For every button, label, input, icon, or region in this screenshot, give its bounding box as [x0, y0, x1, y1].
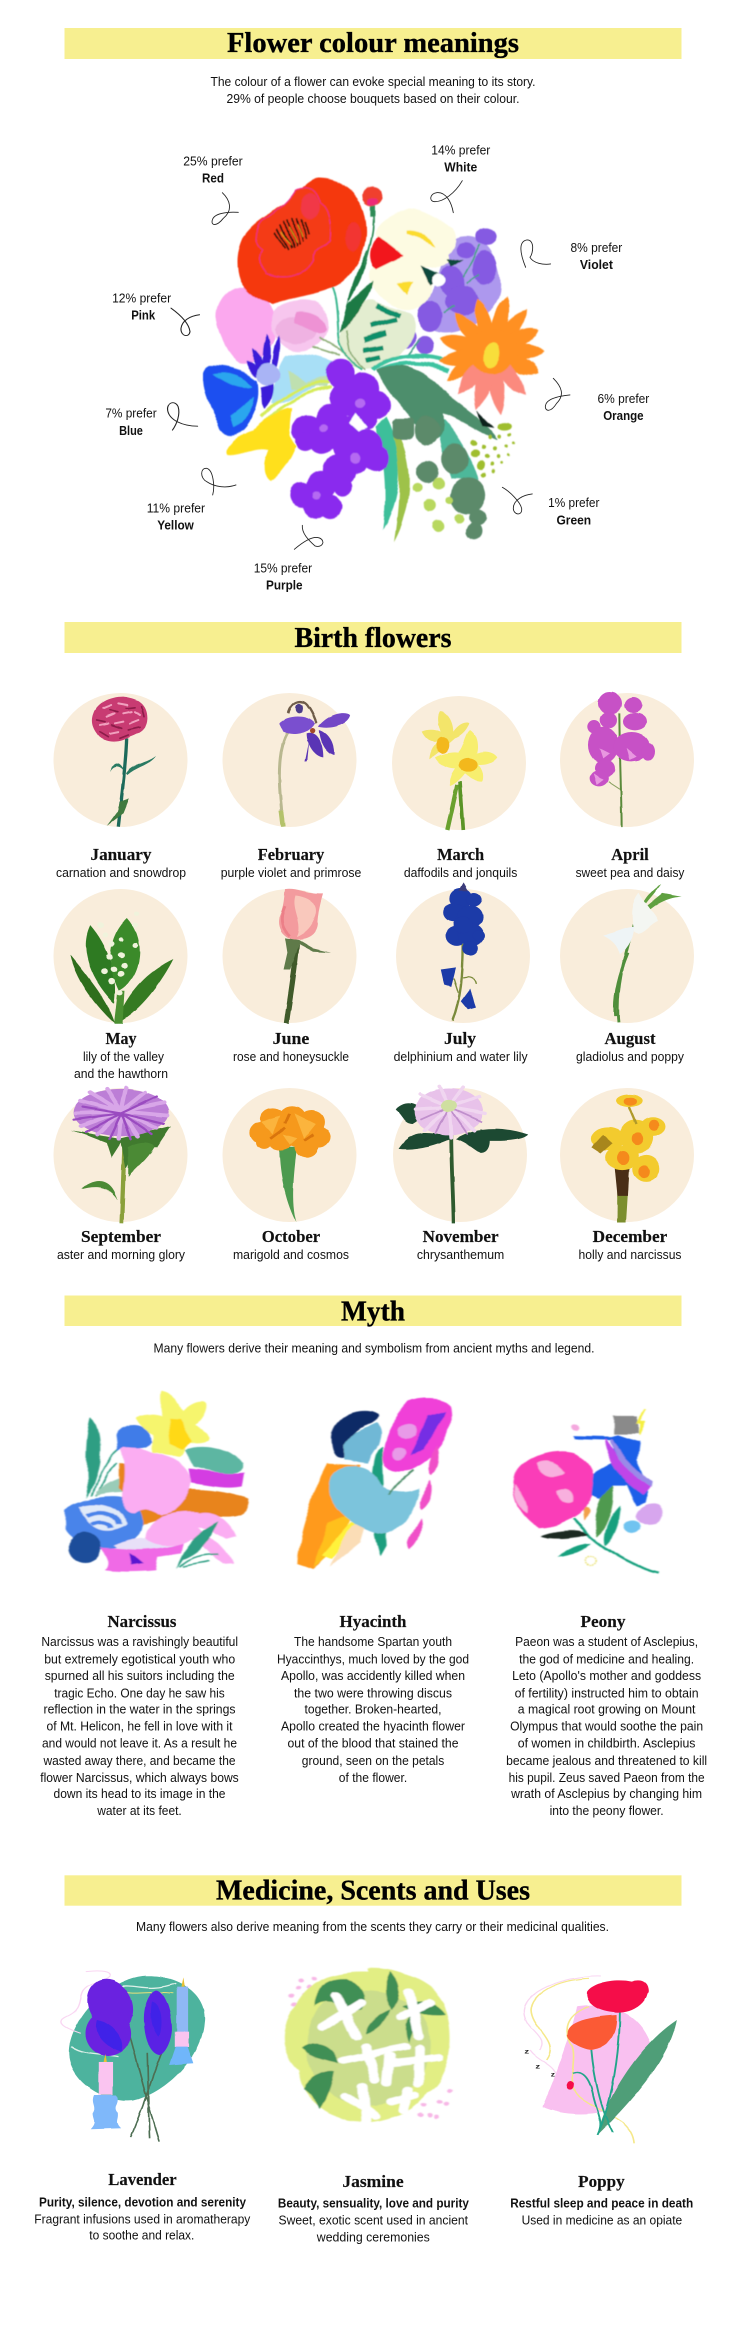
intro text: 29% of people choose bouquets based on their colour. — [226, 92, 520, 106]
story: narcissus: flower Narcissus, which always bows — [40, 1771, 239, 1785]
heading: birth flowers: Birth flowers — [294, 622, 452, 654]
story: peony — [506, 1612, 707, 1818]
flower: delphinium — [441, 883, 485, 1021]
looped leader lines — [202, 181, 570, 549]
flower: rose — [279, 889, 331, 1024]
captions row 3: aster and morning glory — [57, 1248, 186, 1262]
poppy flowers and leaf — [524, 1976, 677, 2143]
illustration: narcissus — [64, 1391, 249, 1572]
captions row 3: September — [81, 1227, 161, 1246]
caption: jasmine: wedding ceremonies — [316, 2230, 430, 2244]
label: purple 15% — [254, 562, 312, 593]
label: blue 7%: 7% prefer — [105, 407, 157, 421]
captions row 3: November — [423, 1227, 499, 1246]
label: green 1% — [548, 496, 599, 527]
illustration: peony — [513, 1409, 663, 1574]
illustration: hyacinth — [297, 1399, 450, 1569]
heading: medicine, scents and uses — [64, 1874, 682, 1906]
label: purple 15%: 15% prefer — [254, 562, 312, 576]
story: narcissus: of Mt. Helicon, he fell in love with it — [46, 1720, 233, 1734]
captions row 2 — [74, 1029, 685, 1081]
captions row 1: March — [437, 845, 485, 864]
story: narcissus: reflection in the water in the springs — [44, 1703, 236, 1717]
sleeping letters: z — [535, 2063, 540, 2070]
yellow petals — [227, 408, 297, 480]
label: orange 6% — [598, 392, 649, 423]
poppy bud — [362, 186, 382, 267]
story: narcissus: but extremely egotistical youth who — [44, 1652, 235, 1666]
sleeping letters: z — [551, 2071, 555, 2078]
olive speckles — [470, 423, 515, 478]
story: peony: the god of medicine and healing. — [519, 1652, 694, 1666]
story: hyacinth: Hyaccinthys, much loved by the god — [277, 1652, 469, 1666]
red petal — [371, 236, 404, 269]
flower: narcissus — [591, 1094, 665, 1223]
white flowers — [370, 208, 456, 310]
caption: jasmine: Jasmine — [342, 2172, 404, 2191]
story: peony: Olympus that would soothe the pain — [510, 1720, 703, 1734]
label: purple 15%: Purple — [266, 579, 303, 593]
flower: carnation — [92, 697, 156, 827]
label: white 14%: 14% prefer — [431, 144, 490, 158]
caption: jasmine: Beauty, sensuality, love and purity — [278, 2197, 469, 2211]
sage blobs — [393, 416, 486, 540]
blue flower — [203, 365, 259, 435]
captions row 3: holly and narcissus — [578, 1248, 682, 1262]
label: violet 8%: Violet — [580, 258, 614, 272]
intro text — [210, 75, 536, 106]
indigo daisy — [247, 333, 280, 409]
label: white 14%: White — [444, 161, 477, 175]
captions row 2: August — [604, 1029, 656, 1048]
label: green 1%: Green — [556, 513, 591, 527]
label: blue 7%: Blue — [119, 424, 143, 438]
story: hyacinth — [277, 1612, 469, 1785]
story: peony: into the peony flower. — [550, 1804, 664, 1818]
caption: poppy: Used in medicine as an opiate — [522, 2213, 682, 2227]
flower: chrysanthemum — [395, 1086, 528, 1223]
story: peony: became jealous and threatened to kill — [506, 1754, 707, 1768]
illustration: jasmine — [284, 1968, 452, 2123]
teal strokes — [373, 355, 450, 370]
story: narcissus: water at its feet. — [96, 1804, 182, 1818]
panel: medicine, scents and uses — [34, 1874, 693, 2244]
white gap between purple flowers — [349, 413, 367, 432]
story: peony: Leto (Apollo's mother and goddess — [512, 1669, 701, 1683]
captions row 2: July — [444, 1029, 477, 1048]
captions row 3: chrysanthemum — [417, 1248, 504, 1262]
flower: lily of the valley — [70, 912, 173, 1024]
label: orange 6%: Orange — [603, 409, 644, 423]
heading: myth: Myth — [341, 1296, 405, 1328]
label: pink 12%: Pink — [131, 308, 155, 322]
captions row 1: January — [90, 845, 152, 864]
panel: flower colour meanings — [64, 27, 682, 593]
captions row 1: purple violet and primrose — [221, 866, 361, 880]
story: narcissus: tragic Echo. One day he saw his — [54, 1686, 225, 1700]
sleeping letters: z — [524, 2048, 529, 2055]
myth intro text: Many flowers derive their meaning and symbolism from ancient myths and legend. — [154, 1342, 594, 1356]
label: green 1%: 1% prefer — [548, 496, 599, 510]
medicine intro text: Many flowers also derive meaning from the scents they carry or their medicinal qualities. — [136, 1920, 609, 1934]
captions row 1: April — [611, 845, 649, 864]
illustration: lavender — [61, 1971, 205, 2142]
intro text: The colour of a flower can evoke special meaning to its story. — [210, 75, 536, 89]
label: yellow 11% — [147, 501, 205, 532]
label: violet 8%: 8% prefer — [570, 241, 622, 255]
label: yellow 11%: Yellow — [157, 518, 194, 532]
story: narcissus: and would not leave it. As a result he — [42, 1737, 237, 1751]
label: pink 12%: 12% prefer — [112, 291, 171, 305]
caption: poppy: Restful sleep and peace in death — [510, 2197, 693, 2211]
caption: lavender — [34, 2170, 251, 2242]
story: hyacinth: The handsome Spartan youth — [294, 1635, 452, 1649]
flower: gladiolus — [603, 884, 682, 1022]
heading: medicine, scents and uses: Medicine, Scents and Uses — [216, 1874, 530, 1906]
label: blue 7% — [105, 407, 157, 438]
captions row 1 — [56, 845, 685, 880]
story: hyacinth: of the flower. — [339, 1771, 407, 1785]
story: hyacinth: the two were throwing discus — [294, 1686, 452, 1700]
violet flowers — [397, 228, 497, 357]
captions row 3 — [57, 1227, 682, 1262]
light blue wash — [272, 354, 333, 404]
bouquet illustration — [203, 178, 545, 542]
caption: poppy: Poppy — [578, 2172, 625, 2191]
captions row 2: delphinium and water lily — [394, 1050, 528, 1064]
story: peony: a magical root growing on Mount — [518, 1703, 696, 1717]
story: peony: wrath of Asclepius by changing him — [510, 1787, 702, 1801]
story: hyacinth: Hyacinth — [340, 1612, 407, 1631]
long leaves — [375, 417, 399, 530]
label: pink 12% — [112, 291, 171, 322]
story: peony: of women in childbirth. Asclepius — [518, 1737, 695, 1751]
story: hyacinth: Apollo created the hyacinth flower — [281, 1720, 465, 1734]
label: red 25%: 25% prefer — [183, 154, 243, 168]
story: peony: Paeon was a student of Asclepius, — [515, 1635, 698, 1649]
story: hyacinth: out of the blood that stained the — [288, 1737, 459, 1751]
story: hyacinth: together. Broken-hearted, — [304, 1703, 442, 1717]
story: narcissus — [40, 1612, 239, 1818]
story: hyacinth: ground, seen on the petals — [302, 1754, 444, 1768]
caption: poppy — [510, 2172, 693, 2227]
pink flowers — [216, 287, 328, 364]
green dots — [412, 478, 464, 532]
sleeping letters — [524, 2048, 555, 2078]
caption: lavender: to soothe and relax. — [89, 2228, 194, 2242]
story: narcissus: Narcissus — [108, 1612, 177, 1631]
flower: violet — [279, 702, 351, 827]
captions row 1: daffodils and jonquils — [404, 866, 517, 880]
label: red 25%: Red — [202, 172, 224, 186]
panel: birth flowers — [54, 622, 694, 1262]
story: peony: Peony — [580, 1612, 626, 1631]
flower: daffodil — [422, 712, 497, 830]
captions row 2: June — [273, 1029, 310, 1048]
illustration: poppy — [524, 1976, 677, 2143]
label: white 14% — [431, 144, 490, 175]
heading: flower colour meanings — [64, 27, 682, 59]
label: red 25% — [183, 154, 243, 186]
heading: myth — [64, 1296, 682, 1328]
captions row 1: February — [258, 845, 325, 864]
heading: birth flowers — [64, 622, 682, 654]
red poppy — [237, 178, 367, 304]
flower: marigold — [249, 1106, 331, 1223]
flower: aster — [71, 1088, 171, 1223]
orange daisy — [438, 293, 545, 416]
sage leaf — [377, 365, 498, 441]
story: hyacinth: Apollo, was accidently killed when — [281, 1669, 465, 1683]
caption: lavender: Lavender — [108, 2170, 177, 2189]
captions row 2: lily of the valley — [83, 1050, 165, 1064]
captions row 2: and the hawthorn — [74, 1067, 168, 1081]
captions row 1: carnation and snowdrop — [56, 866, 186, 880]
captions row 2: gladiolus and poppy — [576, 1050, 685, 1064]
story: narcissus: spurned all his suitors including the — [45, 1669, 235, 1683]
label: orange 6%: 6% prefer — [598, 392, 649, 406]
story: narcissus: down its head to its image in the — [54, 1787, 226, 1801]
story: narcissus: Narcissus was a ravishingly beautiful — [41, 1635, 238, 1649]
panel: myth — [40, 1296, 707, 1818]
purple flowers — [289, 359, 390, 519]
label: violet 8% — [570, 241, 622, 272]
violet background wash — [422, 236, 500, 333]
captions row 3: December — [593, 1227, 668, 1246]
looped leader: blue — [168, 403, 198, 430]
captions row 3: October — [262, 1227, 321, 1246]
captions row 3: marigold and cosmos — [233, 1248, 349, 1262]
captions row 2: May — [106, 1029, 137, 1048]
caption: jasmine: Sweet, exotic scent used in ancient — [279, 2213, 469, 2227]
heading: flower colour meanings: Flower colour meanings — [227, 27, 519, 59]
label: yellow 11%: 11% prefer — [147, 501, 205, 515]
looped leader: pink — [171, 308, 200, 336]
beige circles — [54, 693, 694, 1222]
story: peony: his pupil. Zeus saved Paeon from the — [509, 1771, 705, 1785]
caption: jasmine — [278, 2172, 469, 2244]
flower: sweet pea — [587, 692, 655, 827]
story: peony: of fertility) instructed him to obtain — [515, 1686, 699, 1700]
caption: lavender: Fragrant infusions used in aromatherapy — [34, 2212, 251, 2226]
central foliage — [340, 300, 416, 369]
caption: lavender: Purity, silence, devotion and serenity — [39, 2196, 246, 2210]
captions row 1: sweet pea and daisy — [576, 866, 685, 880]
captions row 2: rose and honeysuckle — [233, 1050, 349, 1064]
story: narcissus: wasted away there, and became the — [43, 1754, 236, 1768]
